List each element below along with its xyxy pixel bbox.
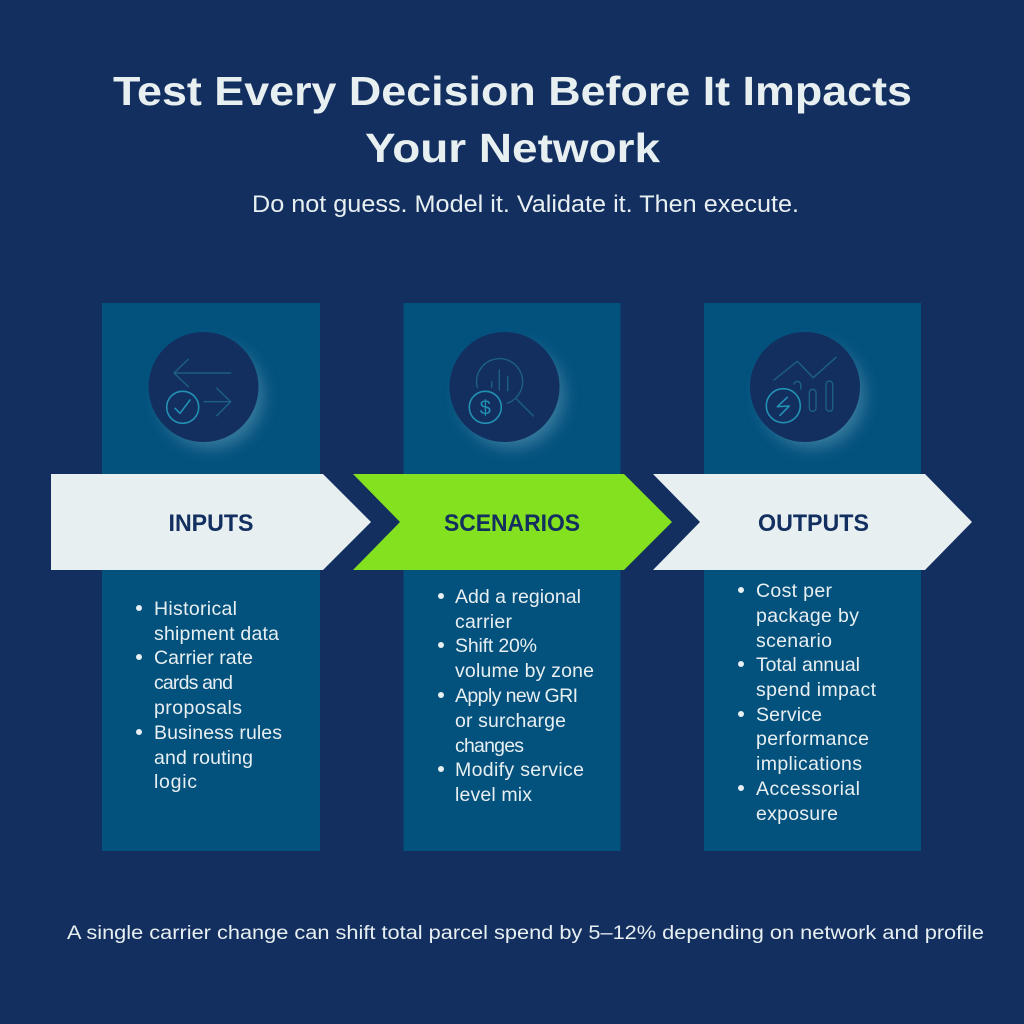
list: outputs: Total annual: [756, 654, 860, 676]
list: outputs: implications: [756, 753, 862, 775]
title: [113, 68, 912, 171]
icon: magnifier with dollar coin: $: [480, 398, 491, 420]
list: scenarios: Modify service: [455, 759, 584, 781]
list: inputs: Carrier rate: [154, 647, 253, 669]
list: inputs: and routing: [154, 747, 253, 769]
list: scenarios: carrier: [455, 611, 512, 633]
list: outputs: Accessorial: [756, 778, 860, 800]
arrow: outputs: [653, 474, 972, 570]
list: scenarios: Add a regional: [455, 586, 581, 608]
icon: arrows with check: [148, 332, 263, 448]
list: scenarios: Apply new GRI: [455, 685, 578, 707]
list: scenarios: level mix: [455, 784, 532, 806]
list: outputs: [738, 580, 877, 825]
list: scenarios: or surcharge: [455, 710, 566, 732]
list: inputs: Historical: [154, 598, 237, 620]
arrow: scenarios: [353, 474, 672, 570]
footer note: A single carrier change can shift total parcel spend by 5–12% depending on network and profile: [67, 923, 984, 944]
list: outputs: Service: [756, 704, 822, 726]
subtitle: Do not guess. Model it. Validate it. Then execute.: [252, 191, 799, 218]
list: outputs: spend impact: [756, 679, 877, 701]
panel: scenarios: [404, 303, 620, 851]
list: inputs: Business rules: [154, 722, 282, 744]
list: scenarios: changes: [455, 735, 524, 757]
list: inputs: proposals: [154, 697, 242, 719]
icon: magnifier with dollar coin: [450, 332, 564, 448]
panel: outputs: [704, 303, 921, 851]
list: inputs: shipment data: [154, 623, 279, 645]
list: scenarios: Shift 20%: [455, 635, 537, 657]
list: outputs: Cost per: [756, 580, 832, 602]
title: Your Network: [365, 125, 660, 171]
list: outputs: performance: [756, 728, 869, 750]
list: outputs: package by: [756, 605, 859, 627]
arrow: scenarios: SCENARIOS: [444, 510, 580, 537]
arrow: inputs: INPUTS: [168, 510, 254, 537]
list: outputs: exposure: [756, 803, 838, 825]
title: Test Every Decision Before It Impacts: [113, 68, 912, 114]
icon: chart with lightning coin: [750, 332, 864, 448]
arrow: inputs: [51, 474, 371, 570]
list: outputs: scenario: [756, 630, 832, 652]
list: scenarios: [438, 586, 594, 806]
arrow: outputs: OUTPUTS: [758, 510, 869, 537]
list: inputs: cards and: [154, 672, 233, 694]
panel: inputs: [102, 303, 320, 851]
list: inputs: logic: [154, 771, 197, 793]
list: inputs: [136, 598, 282, 793]
list: scenarios: volume by zone: [455, 660, 594, 682]
